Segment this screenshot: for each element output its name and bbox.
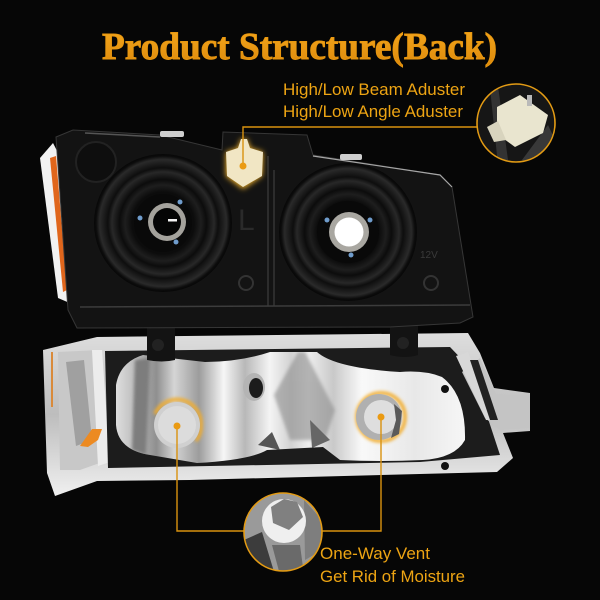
reflector center shadow: [274, 352, 335, 440]
left corner section: [58, 350, 108, 470]
adjuster label: High/Low Beam Aduster: [283, 81, 466, 99]
right lamp socket: [279, 163, 417, 301]
adjuster callout line: [243, 127, 478, 167]
upper bracket tabs: [147, 322, 175, 362]
lower chrome lamp: [43, 322, 530, 496]
white and amber lens edge: [40, 143, 72, 304]
reflector center dark facet: [258, 432, 280, 450]
chrome reflector: [114, 350, 468, 465]
right tab: [462, 358, 530, 430]
adjuster with glow: [226, 139, 263, 189]
dark cavity: [105, 347, 500, 468]
vent anchor dots: [174, 414, 384, 430]
amber edge: [51, 352, 53, 407]
left lamp socket: [94, 154, 232, 292]
screw holes: [441, 385, 449, 393]
top clips: [160, 131, 184, 137]
upper black lamp housing: [40, 130, 473, 328]
adjuster anchor dot: [240, 162, 246, 170]
adjuster label: High/Low Angle Aduster: [283, 103, 464, 121]
small blank plug: [76, 142, 116, 182]
corner details: [239, 276, 253, 290]
vent label: Get Rid of Moisture: [320, 568, 465, 586]
housing body: [56, 130, 473, 328]
inner divider: [268, 156, 274, 306]
title: Product Structure(Back): [102, 26, 497, 68]
adjuster label: [283, 81, 466, 121]
embossed 12V mark: 12V: [420, 250, 438, 261]
right vent with glow: [356, 393, 405, 441]
reflector left dark band: [132, 358, 150, 455]
vent callout lines: [177, 417, 381, 531]
top highlights: [313, 156, 452, 187]
vent detail circle: [244, 493, 322, 575]
vent label: One-Way Vent: [320, 545, 430, 563]
vent label: [320, 545, 465, 586]
amber reflector mark: [80, 429, 102, 447]
frame: [43, 333, 530, 496]
left vent with glow: [154, 399, 201, 448]
bracket holes: [152, 339, 164, 351]
embossed L mark: L: [238, 204, 255, 237]
reflector small hole: [243, 373, 265, 401]
adjuster detail circle: [477, 84, 560, 165]
